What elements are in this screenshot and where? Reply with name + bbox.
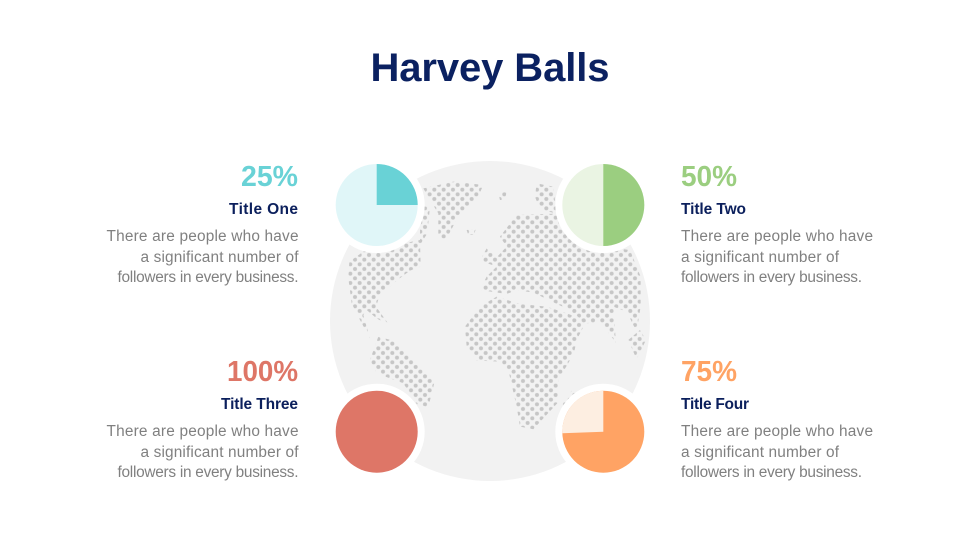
text block: 25%: a significant number of [140, 249, 299, 266]
text block: 100%: a significant number of [140, 444, 299, 461]
text block: 75%: a significant number of [681, 444, 840, 461]
text block: 50%: Title Two [681, 201, 746, 218]
text block: 100%: There are people who have [106, 423, 298, 440]
text block: 75%: There are people who have [681, 423, 873, 440]
text block: 25%: followers in every business. [118, 269, 298, 286]
text block: 100%: followers in every business. [118, 464, 298, 481]
dotted continents [348, 182, 646, 429]
text block: 75% [681, 356, 873, 481]
harvey ball: 75% [555, 384, 651, 480]
text block: 75%: Title Four [681, 396, 749, 413]
text block: 25%: 25% [241, 161, 298, 193]
text block: 100%: 100% [227, 356, 298, 388]
harvey ball: 100% [329, 384, 425, 480]
harvey ball: 25% [329, 157, 425, 253]
text block: 25%: There are people who have [106, 228, 298, 245]
text block: 25% [106, 161, 299, 286]
text block: 50%: followers in every business. [681, 269, 862, 286]
text block: 75%: followers in every business. [681, 464, 862, 481]
globe with dotted world map [330, 161, 650, 481]
text block: 50%: a significant number of [681, 249, 840, 266]
text block: 75%: 75% [681, 356, 737, 388]
text block: 100% [106, 356, 299, 481]
text block: 50%: 50% [681, 161, 737, 193]
text block: 50%: There are people who have [681, 228, 873, 245]
harvey ball: 50% [555, 157, 651, 253]
title: Harvey Balls [370, 46, 610, 90]
text block: 100%: Title Three [221, 396, 298, 413]
text block: 50% [681, 161, 873, 286]
text block: 25%: Title One [229, 201, 298, 218]
